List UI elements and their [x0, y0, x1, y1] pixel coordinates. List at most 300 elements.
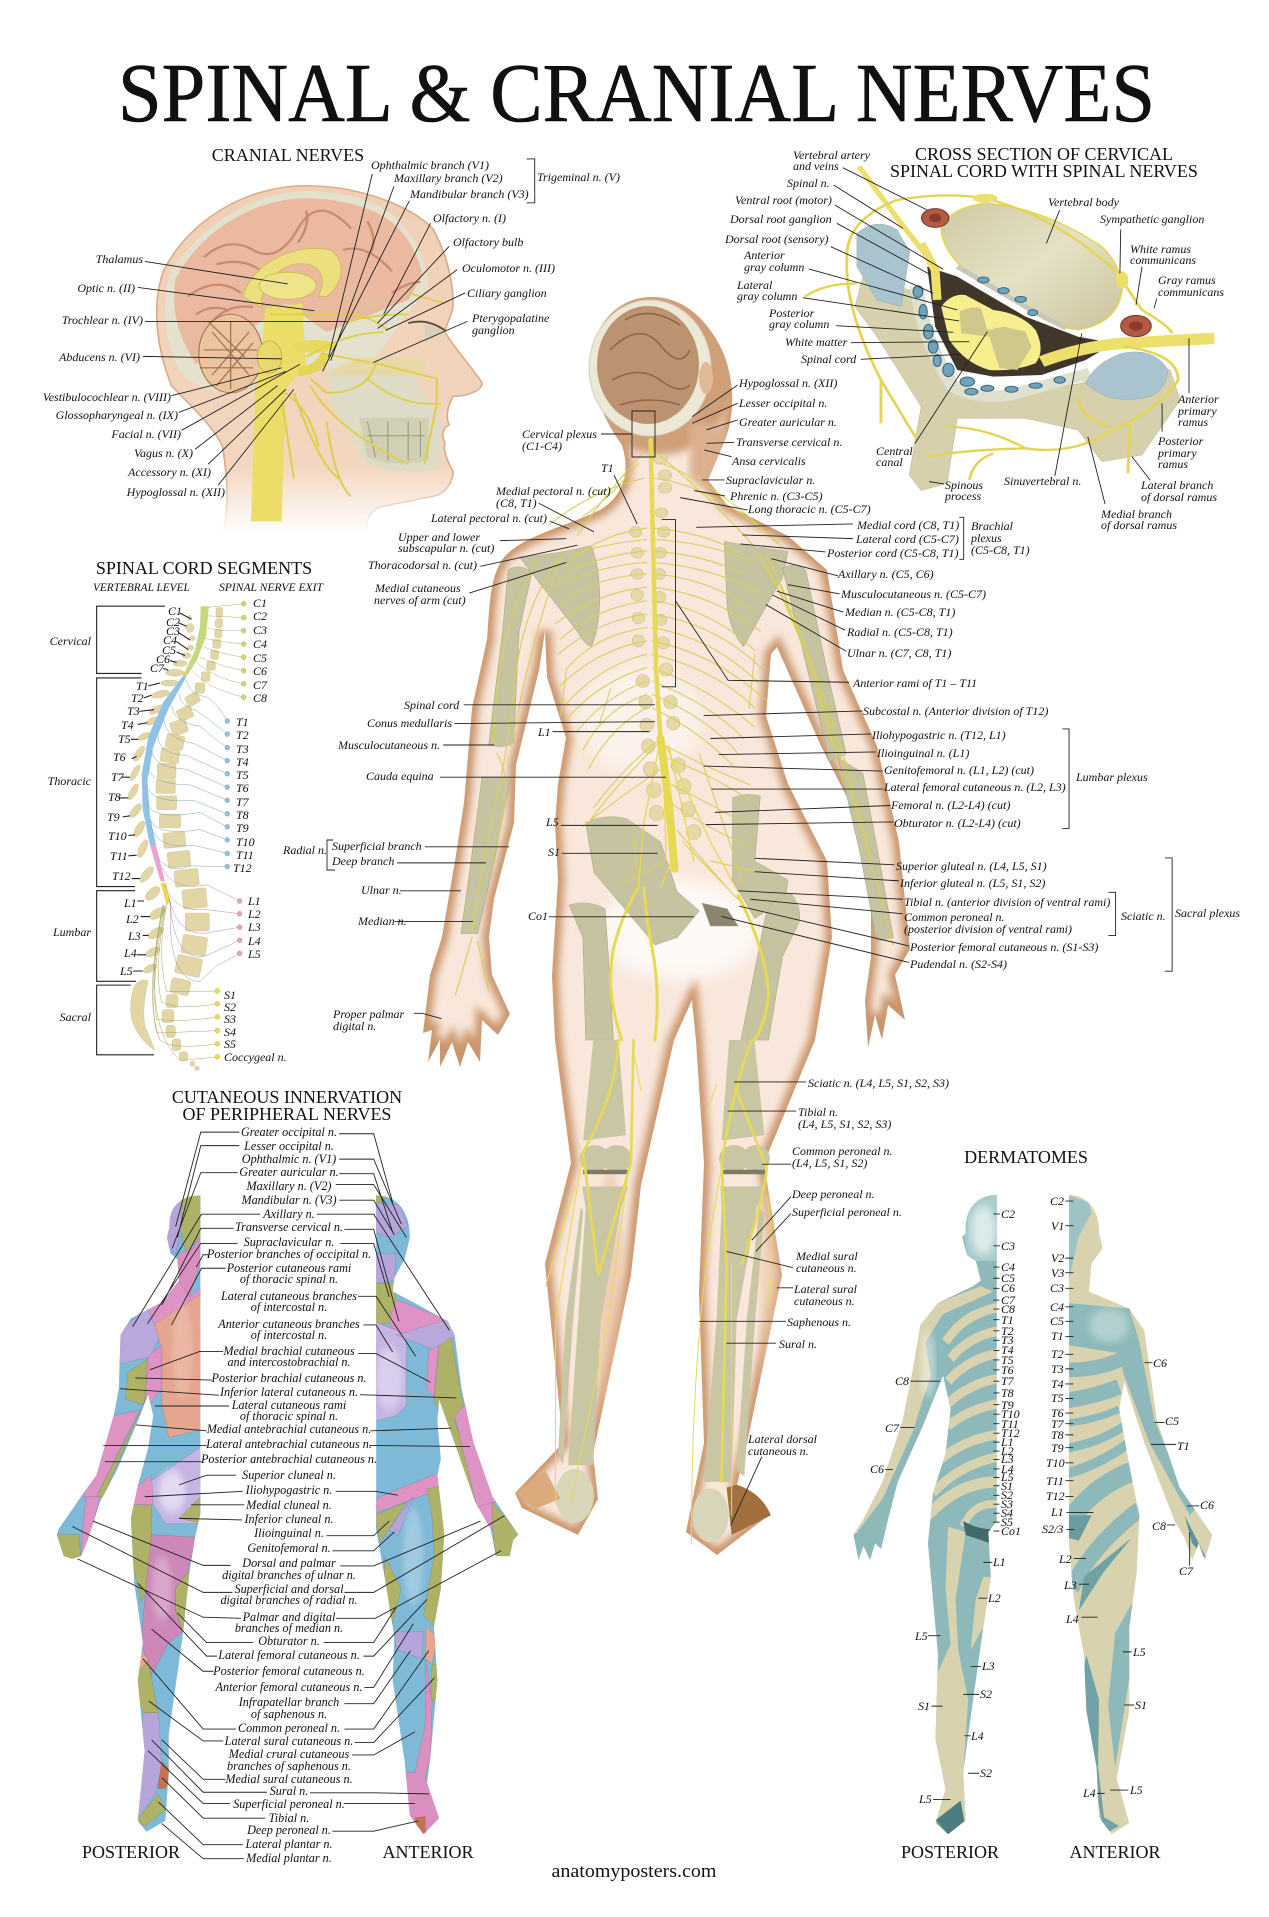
labels: vertebral levels: T9	[107, 810, 120, 824]
head sagittal illustration	[157, 186, 482, 545]
labels: cross section: Vertebral body	[1048, 195, 1120, 209]
panel: spinal cord segments	[48, 558, 324, 1070]
labels: cutaneous nerve list: of saphenous n.	[251, 1707, 327, 1721]
labels and leaders: main figure right side: cutaneous n.	[794, 1294, 855, 1308]
labels: vertebral levels: L2	[125, 912, 139, 926]
labels: dermatomes posterior: S1	[1001, 1479, 1013, 1493]
heading: cross section: CROSS SECTION OF CERVICAL	[915, 144, 1173, 164]
labels: cutaneous nerve list: digital branches of radial n.	[220, 1593, 358, 1607]
labels and leaders: main figure left side: Proper palmar	[332, 1007, 405, 1021]
labels: cross section: ramus	[1178, 415, 1208, 429]
labels: vertebral levels: C2	[166, 615, 180, 629]
labels: cross section: ramus	[1158, 457, 1188, 471]
labels: dermatomes anterior: T6	[1051, 1406, 1064, 1420]
labels: dermatomes posterior: T10	[1001, 1407, 1020, 1421]
labels and leaders: main figure left side: Medial cutaneous	[374, 581, 461, 595]
skeleton bones upper body	[461, 541, 893, 1040]
skeleton bones legs and feet	[515, 1040, 771, 1542]
labels: dermatomes posterior: S4	[1001, 1506, 1013, 1520]
labels: cross section: Dorsal root (sensory)	[724, 232, 829, 246]
heading: spinal cord segments: SPINAL CORD SEGMENTS	[96, 558, 312, 578]
labels: spinal nerve exits: C1	[253, 596, 267, 610]
labels: cutaneous nerve list: Ilioinguinal n.	[253, 1526, 324, 1540]
labels: vertebral levels: L5	[119, 964, 133, 978]
labels: spinal nerve exits: Coccygeal n.	[224, 1050, 287, 1064]
labels: cutaneous nerve list: Lesser occipital n.	[243, 1139, 334, 1153]
labels: cutaneous nerve list: Lateral cutaneous branches	[220, 1289, 357, 1303]
labels: spinal nerve exits: L3	[247, 920, 261, 934]
labels: spinal nerve exits: T2	[236, 728, 249, 742]
labels: cutaneous nerve list: Axillary n.	[262, 1207, 315, 1221]
labels: vertebral levels: T6	[113, 750, 126, 764]
labels and leaders: main figure left side: Spinal cord	[404, 698, 460, 712]
labels: dermatomes posterior: T3	[1001, 1333, 1014, 1347]
labels and leaders: main figure right side: (posterior division of ventral rami)	[904, 922, 1072, 936]
labels and leaders: main figure right side: Obturator n. (L2-L4) (cut)	[894, 816, 1021, 830]
labels: vertebral levels: T3	[127, 704, 140, 718]
labels: cranial nerves: Glossopharyngeal n. (IX)	[56, 408, 178, 422]
labels: spinal nerve exits: T12	[233, 861, 252, 875]
labels: dermatomes anterior: S1	[1135, 1698, 1147, 1712]
labels and leaders: main figure right side: cutaneous n.	[748, 1444, 809, 1458]
labels: cutaneous nerve list: of thoracic spinal n.	[240, 1409, 338, 1423]
labels: cutaneous nerve list: Mandibular n. (V3)	[240, 1193, 337, 1207]
leader lines: cutaneous	[72, 1132, 505, 1859]
labels and leaders: main figure right side: Common peroneal n.	[904, 910, 1005, 924]
labels and leaders: main figure right side: Lesser occipital n.	[738, 396, 827, 410]
labels and leaders: main figure right side: Lumbar plexus	[1075, 770, 1148, 784]
labels: spinal nerve exits: C3	[253, 623, 267, 637]
labels and leaders: main figure right side: (L4, L5, S1, S2, S3)	[798, 1117, 891, 1131]
labels: spinal nerve exits: T9	[236, 821, 249, 835]
labels: cutaneous nerve list: Dorsal and palmar	[241, 1556, 336, 1570]
labels and leaders: main figure left side: nerves of arm (cut)	[374, 593, 466, 607]
website credit: anatomyposters.com	[552, 1861, 717, 1882]
labels and leaders: main figure left side: S1	[548, 845, 560, 859]
labels: cutaneous nerve list: of thoracic spinal n.	[240, 1272, 338, 1286]
labels: cutaneous nerve list: Ophthalmic n. (V1)	[242, 1152, 336, 1166]
labels: spinal nerve exits: C7	[253, 678, 268, 692]
labels: dermatomes posterior: L2	[987, 1591, 1001, 1605]
labels and leaders: main figure right side: Tibial n. (anterior division of ventral rami)	[904, 895, 1110, 909]
labels: cutaneous nerve list: Transverse cervical n.	[235, 1220, 343, 1234]
labels: cranial nerves: Ciliary ganglion	[467, 286, 547, 300]
labels: spinal nerve exits: T8	[236, 808, 249, 822]
labels: cross section: of dorsal ramus	[1101, 518, 1177, 532]
head with exposed brain	[589, 300, 713, 436]
labels: cross section: Vertebral artery	[793, 148, 871, 162]
labels: cutaneous nerve list: Supraclavicular n.	[244, 1235, 334, 1249]
labels: cutaneous nerve list: digital branches of ulnar n.	[222, 1568, 356, 1582]
labels and leaders: main figure right side: Posterior cord (C5-C8, T1)	[826, 546, 959, 560]
labels: vertebral levels: L4	[123, 946, 137, 960]
labels: spinal nerve exits: T10	[236, 835, 255, 849]
labels and leaders: main figure right side: Greater auricular n.	[739, 415, 837, 429]
labels: cutaneous nerve list: Genitofemoral n.	[247, 1541, 331, 1555]
panel: main posterior body figure	[423, 285, 910, 1555]
labels and leaders: main figure right side: Femoral n. (L2-L4) (cut)	[890, 798, 1010, 812]
labels: cross section	[724, 148, 1224, 532]
labels: dermatomes anterior: L5	[1129, 1783, 1143, 1797]
labels and leaders: main figure right side: Ansa cervicalis	[731, 454, 806, 468]
labels: cutaneous nerve list: Lateral femoral cutaneous n.	[217, 1648, 360, 1662]
labels: dermatomes posterior: C3	[1001, 1239, 1015, 1253]
labels and leaders: main figure right side: Inferior gluteal n. (L5, S1, S2)	[899, 876, 1045, 890]
labels: dermatomes posterior: L3	[1000, 1452, 1014, 1466]
labels: dermatomes posterior: C8	[895, 1374, 909, 1388]
labels and leaders: main figure right side: Musculocutaneous n. (C5-C7)	[840, 587, 986, 601]
heading: cross section	[890, 144, 1198, 181]
labels: cutaneous nerve list: Medial sural cutaneous n.	[224, 1772, 353, 1786]
labels: cutaneous nerve list: Iliohypogastric n.	[245, 1483, 332, 1497]
nerve network lower legs	[545, 1040, 772, 1543]
labels: spinal nerve exits: T5	[236, 768, 249, 782]
labels: cutaneous nerve list: Posterior antebrachial cutaneous n.	[200, 1452, 377, 1466]
captions: posterior and anterior	[82, 1842, 474, 1862]
labels: cross section: Posterior	[768, 306, 815, 320]
labels: cranial nerves: Maxillary branch (V2)	[393, 171, 503, 185]
labels and leaders: main figure right side: Iliohypogastric n. (T12, L1)	[871, 728, 1006, 742]
labels: cranial nerves	[43, 158, 620, 499]
labels: dermatomes anterior	[1042, 1194, 1214, 1800]
labels: dermatomes posterior: L1	[1000, 1435, 1014, 1449]
labels: spinal nerve exits: T11	[236, 848, 254, 862]
labels: cross section: White ramus	[1130, 242, 1191, 256]
labels: cross section: Spinous	[945, 478, 983, 492]
labels: spinal nerve exits	[224, 596, 287, 1064]
labels: cranial nerves: ganglion	[472, 323, 515, 337]
labels: cranial nerves: Mandibular branch (V3)	[409, 187, 529, 201]
labels: dermatomes posterior: T7	[1001, 1374, 1015, 1388]
labels: cranial nerves: Olfactory bulb	[453, 235, 523, 249]
labels and leaders: main figure left side: (C8, T1)	[496, 496, 537, 510]
labels: dermatomes anterior: L1	[1050, 1505, 1064, 1519]
labels: cutaneous nerve list: Anterior cutaneous branches	[217, 1317, 360, 1331]
labels: vertebral levels: L3	[127, 929, 141, 943]
labels: cross section: Anterior	[743, 248, 785, 262]
labels: dermatomes anterior: T2	[1051, 1347, 1064, 1361]
labels: cross section: Lateral branch	[1140, 478, 1213, 492]
labels: dermatomes posterior: S5	[1001, 1515, 1013, 1529]
labels: cranial nerves: Oculomotor n. (III)	[462, 261, 555, 275]
labels: dermatomes anterior: C8	[1152, 1519, 1166, 1533]
labels: vertebral levels: C5	[162, 643, 176, 657]
labels: cross section: gray column	[737, 289, 797, 303]
labels: cross section: Dorsal root ganglion	[729, 212, 832, 226]
labels: spinal nerve exits: T3	[236, 742, 249, 756]
labels: cross section: canal	[876, 455, 903, 469]
labels: cutaneous nerve list: Greater auricular n.	[239, 1165, 339, 1179]
labels and leaders: main figure left side: Medial pectoral n. (cut)	[495, 484, 611, 498]
labels and leaders: main figure right side: Lateral femoral cutaneous n. (L2, L3)	[883, 780, 1066, 794]
labels: dermatomes anterior: T5	[1051, 1391, 1064, 1405]
labels and leaders: main figure right side: Median n. (C5-C8, T1)	[844, 605, 955, 619]
labels: vertebral levels: T7	[111, 770, 125, 784]
labels: dermatomes anterior: C6	[1153, 1356, 1167, 1370]
labels: dermatomes posterior: C6	[870, 1462, 884, 1476]
labels and leaders: main figure left side: Deep branch	[331, 854, 394, 868]
labels: vertebral levels: Thoracic	[48, 774, 92, 788]
labels: cutaneous nerve list: of intercostal n.	[251, 1328, 327, 1342]
labels and leaders: main figure right side: Phrenic n. (C3-C5)	[729, 489, 823, 503]
labels and leaders: main figure right side: Sural n.	[779, 1337, 817, 1351]
labels: cutaneous nerve list: branches of median n.	[235, 1621, 343, 1635]
labels: cross section: Spinal cord	[801, 352, 857, 366]
brackets and ticks: spine regions	[97, 606, 192, 1055]
labels: dermatomes anterior: C5	[1165, 1414, 1179, 1428]
labels: dermatomes posterior: T1	[1001, 1313, 1014, 1327]
labels and leaders: main figure left side: Ulnar n.	[361, 883, 402, 897]
labels: cutaneous nerve list: Medial antebrachial cutaneous n.	[206, 1422, 371, 1436]
labels: dermatomes anterior: L4	[1065, 1612, 1079, 1626]
labels: cutaneous nerve list: Medial cluneal n.	[245, 1498, 332, 1512]
labels: cranial nerves: Facial n. (VII)	[110, 427, 181, 441]
labels: dermatomes posterior: T4	[1001, 1343, 1014, 1357]
labels: vertebral levels: T2	[131, 691, 144, 705]
labels: spinal nerve exits: C2	[253, 609, 267, 623]
labels and leaders: main figure right side: Sciatic n. (L4, L5, S1, S2, S3)	[808, 1076, 949, 1090]
labels and leaders: main figure right side: Supraclavicular n.	[726, 473, 815, 487]
labels: vertebral levels: T1	[136, 679, 149, 693]
labels and leaders: main figure right side: Lateral sural	[793, 1282, 858, 1296]
labels: dermatomes anterior: T4	[1051, 1377, 1064, 1391]
labels: cutaneous nerve list: Posterior cutaneous rami	[226, 1261, 352, 1275]
labels: vertebral levels: C3	[166, 624, 180, 638]
labels and leaders: main figure right side: Medial cord (C8, T1)	[856, 518, 959, 532]
labels: dermatomes posterior: L1	[992, 1555, 1006, 1569]
leader lines: cross section	[803, 168, 1189, 504]
captions: dermatomes posterior and anterior: POSTERIOR	[901, 1842, 999, 1862]
labels: cutaneous nerve list: Palmar and digital	[242, 1610, 336, 1624]
panel: cross section of cervical spinal cord	[724, 144, 1224, 532]
labels and leaders: main figure left side: (C1-C4)	[522, 439, 562, 453]
labels and leaders: main figure right side: Posterior femoral cutaneous n. (S1-S3)	[909, 940, 1098, 954]
labels: dermatomes posterior: C7	[1001, 1293, 1016, 1307]
heading: cranial nerves: CRANIAL NERVES	[212, 145, 364, 165]
subheadings: SPINAL NERVE EXIT	[219, 581, 324, 594]
labels: dermatomes anterior: C6	[1200, 1498, 1214, 1512]
labels: dermatomes anterior: L3	[1063, 1578, 1077, 1592]
labels: spinal nerve exits: L2	[247, 907, 261, 921]
labels and leaders: main figure left side: Cauda equina	[366, 769, 434, 783]
labels and leaders: main figure right side: Sacral plexus	[1175, 906, 1240, 920]
labels: cutaneous nerve list: Superficial peroneal n.	[233, 1797, 345, 1811]
labels: dermatomes posterior: L2	[1000, 1444, 1014, 1458]
labels and leaders: main figure right side: Hypoglossal n. (XII)	[738, 376, 837, 390]
labels: spinal nerve exits: L5	[247, 947, 261, 961]
labels: spinal nerve exits: S3	[224, 1012, 236, 1026]
labels: cutaneous nerve list: Lateral antebrachial cutaneous n.	[205, 1437, 372, 1451]
labels: dermatomes anterior: T3	[1051, 1362, 1064, 1376]
labels: cross section: gray column	[769, 317, 829, 331]
labels: vertebral levels: C4	[163, 633, 177, 647]
captions: dermatomes posterior and anterior: ANTERIOR	[1070, 1842, 1160, 1862]
labels: dermatomes posterior: L4	[970, 1729, 984, 1743]
labels: spinal nerve exits: T7	[236, 795, 250, 809]
labels: cutaneous nerve list: Lateral sural cutaneous n.	[224, 1734, 353, 1748]
labels: cutaneous nerve list: Greater occipital n.	[241, 1125, 337, 1139]
labels: cutaneous nerve list: Inferior lateral cutaneous n.	[219, 1385, 358, 1399]
figure: dermatomes anterior	[1066, 1191, 1217, 1840]
labels: cutaneous nerve list: Common peroneal n.	[238, 1721, 340, 1735]
labels: dermatomes anterior: V2	[1051, 1251, 1064, 1265]
captions: dermatomes posterior and anterior	[901, 1842, 1160, 1862]
labels: cross section: Central	[876, 444, 913, 458]
labels and leaders: main figure right side: cutaneous n.	[796, 1261, 857, 1275]
labels and leaders: main figure left side: L1	[537, 725, 551, 739]
labels: cranial nerves: Optic n. (II)	[77, 281, 135, 295]
labels: vertebral levels	[48, 604, 182, 1024]
labels: spinal nerve exits: C4	[253, 637, 267, 651]
labels and leaders: main figure left side: Cervical plexus	[522, 427, 597, 441]
labels: spinal nerve exits: S5	[224, 1037, 236, 1051]
labels: vertebral levels: Lumbar	[52, 925, 91, 939]
heading: cutaneous innervation: OF PERIPHERAL NERVES	[183, 1104, 391, 1124]
labels: cutaneous nerve list: of intercostal n.	[251, 1300, 327, 1314]
labels: cutaneous nerve list: and intercostobrachial n.	[227, 1355, 351, 1369]
labels: dermatomes anterior: V3	[1051, 1266, 1064, 1280]
cross section illustration	[805, 167, 1214, 491]
labels and leaders: main figure left side: digital n.	[333, 1019, 376, 1033]
labels: vertebral levels: T4	[121, 718, 134, 732]
labels: cross section: and veins	[793, 159, 839, 173]
labels: cranial nerves: Trigeminal n. (V)	[537, 170, 620, 184]
labels: cutaneous nerve list: Medial crural cutaneous	[228, 1747, 349, 1761]
labels: cross section: primary	[1177, 404, 1217, 418]
labels: dermatomes anterior: V1	[1051, 1219, 1064, 1233]
labels: vertebral levels: C6	[156, 652, 170, 666]
labels: cranial nerves: Olfactory n. (I)	[433, 211, 506, 225]
labels: dermatomes anterior: T7	[1051, 1417, 1065, 1431]
labels: spinal nerve exits: S1	[224, 988, 236, 1002]
panel: dermatomes	[847, 1147, 1217, 1862]
labels: cross section: Spinal n.	[787, 176, 830, 190]
labels: dermatomes posterior: L4	[1000, 1462, 1014, 1476]
labels: spinal nerve exits: T6	[236, 781, 249, 795]
labels and leaders: main figure right side: Ulnar n. (C7, C8, T1)	[847, 646, 951, 660]
labels: dermatomes posterior: T12	[1001, 1426, 1020, 1440]
spine illustration	[126, 601, 246, 1070]
captions: posterior and anterior: ANTERIOR	[382, 1842, 474, 1862]
captions: posterior and anterior: POSTERIOR	[82, 1842, 180, 1862]
labels: vertebral levels: T12	[112, 869, 131, 883]
labels: spinal nerve exits: C6	[253, 664, 267, 678]
labels: vertebral levels: Cervical	[50, 634, 92, 648]
labels: cranial nerves: Vagus n. (X)	[134, 446, 193, 460]
labels: dermatomes anterior: C5	[1050, 1314, 1064, 1328]
labels and leaders: main figure right side: Genitofemoral n. (L1, L2) (cut)	[884, 763, 1034, 777]
labels: dermatomes posterior: L5	[914, 1629, 928, 1643]
labels: cranial nerves: Accessory n. (XI)	[127, 465, 211, 479]
labels: vertebral levels: C1	[168, 604, 182, 618]
labels: dermatomes posterior: T6	[1001, 1363, 1014, 1377]
labels: cross section: Sinuvertebral n.	[1004, 474, 1081, 488]
figure: cutaneous posterior body	[52, 1189, 203, 1837]
labels: cutaneous nerve list: Maxillary n. (V2)	[246, 1179, 331, 1193]
labels: dermatomes anterior: T10	[1046, 1456, 1065, 1470]
labels and leaders: main figure right side: Lateral cord (C5-C7)	[855, 532, 959, 546]
labels: spinal nerve exits: C5	[253, 651, 267, 665]
labels: cutaneous nerve list: Sural n.	[270, 1784, 308, 1798]
labels: cross section: process	[944, 489, 982, 503]
labels: dermatomes posterior: T9	[1001, 1398, 1014, 1412]
labels: dermatomes anterior: C4	[1050, 1300, 1064, 1314]
labels: cutaneous nerve list: Superficial and dorsal	[234, 1582, 344, 1596]
labels: dermatomes anterior: T11	[1046, 1474, 1064, 1488]
labels and leaders: main figure right side: Sciatic n.	[1121, 909, 1166, 923]
labels: spinal nerve exits: L1	[247, 894, 261, 908]
labels: spinal nerve exits: L4	[247, 934, 261, 948]
labels: dermatomes posterior: S1	[918, 1699, 930, 1713]
labels and leaders: main figure left side: Thoracodorsal n. (cut)	[368, 558, 477, 572]
labels: cross section: Sympathetic ganglion	[1100, 212, 1204, 226]
labels and leaders: main figure left side: Co1	[528, 909, 548, 923]
labels: spinal nerve exits: S4	[224, 1025, 236, 1039]
labels: cross section: Medial branch	[1100, 507, 1172, 521]
panel: cranial nerves	[43, 145, 620, 545]
labels: dermatomes posterior: T2	[1001, 1324, 1014, 1338]
figure: cutaneous anterior body	[374, 1189, 522, 1842]
panel: cutaneous innervation	[52, 1087, 522, 1865]
labels: cross section: White matter	[785, 335, 848, 349]
labels and leaders: main figure left side: Lateral pectoral n. (cut)	[430, 511, 547, 525]
labels: dermatomes anterior: C7	[1179, 1564, 1194, 1578]
labels and leaders: main figure left side	[282, 411, 694, 1033]
labels: dermatomes anterior: T9	[1051, 1441, 1064, 1455]
labels: cutaneous nerve list: Medial brachial cutaneous	[222, 1344, 355, 1358]
labels: dermatomes posterior: C7	[885, 1421, 900, 1435]
labels: dermatomes anterior: L5	[1132, 1645, 1146, 1659]
labels: dermatomes anterior: S2/3	[1042, 1522, 1063, 1536]
labels: cranial nerves: Hypoglossal n. (XII)	[126, 485, 225, 499]
labels and leaders: main figure right side: Transverse cervical n.	[736, 435, 842, 449]
tick marks: dermatomes	[885, 1201, 1199, 1800]
labels and leaders: main figure left side: Musculocutaneous n.	[337, 738, 440, 752]
heading: cutaneous innervation	[172, 1087, 402, 1124]
labels: dermatomes anterior: T12	[1046, 1489, 1065, 1503]
labels: vertebral levels: L1	[123, 896, 137, 910]
labels and leaders: main figure right side: (L4, L5, S1, S2)	[792, 1156, 867, 1170]
labels and leaders: main figure right side: plexus	[970, 531, 1002, 545]
title: SPINAL & CRANIAL NERVES	[118, 47, 1155, 140]
labels: cranial nerves: Abducens n. (VI)	[58, 350, 140, 364]
labels and leaders: main figure left side: L5	[545, 815, 559, 829]
labels and leaders: main figure right side: Superficial peroneal n.	[792, 1205, 902, 1219]
labels: cutaneous nerve list: Lateral plantar n.	[244, 1837, 333, 1851]
figure: dermatomes posterior	[847, 1191, 1003, 1840]
labels: cranial nerves: Trochlear n. (IV)	[62, 313, 143, 327]
labels and leaders: main figure right side: Tibial n.	[798, 1105, 838, 1119]
labels: vertebral levels: T5	[118, 732, 131, 746]
labels: dermatomes posterior: L5	[918, 1792, 932, 1806]
labels: dermatomes posterior: C2	[1001, 1207, 1015, 1221]
labels and leaders: main figure right side: Saphenous n.	[787, 1315, 851, 1329]
labels: cranial nerves: Pterygopalatine	[471, 311, 550, 325]
labels and leaders: main figure left side: subscapular n. (cut)	[398, 541, 494, 555]
labels: dermatomes posterior: T8	[1001, 1386, 1014, 1400]
labels: dermatomes posterior: S2	[1001, 1488, 1013, 1502]
labels and leaders: main figure right side	[662, 376, 1240, 1525]
labels and leaders: main figure right side: Radial n. (C5-C8, T1)	[846, 625, 953, 639]
labels: spinal nerve exits: C8	[253, 691, 267, 705]
labels: spinal nerve exits: T4	[236, 755, 249, 769]
labels: cross section: Ventral root (motor)	[735, 193, 832, 207]
labels and leaders: main figure right side: Subcostal n. (Anterior division of T12)	[863, 704, 1048, 718]
labels: dermatomes posterior: T5	[1001, 1353, 1014, 1367]
labels: cutaneous nerve list: Medial plantar n.	[245, 1851, 332, 1865]
subheadings	[93, 581, 324, 594]
labels: dermatomes posterior: C5	[1001, 1271, 1015, 1285]
